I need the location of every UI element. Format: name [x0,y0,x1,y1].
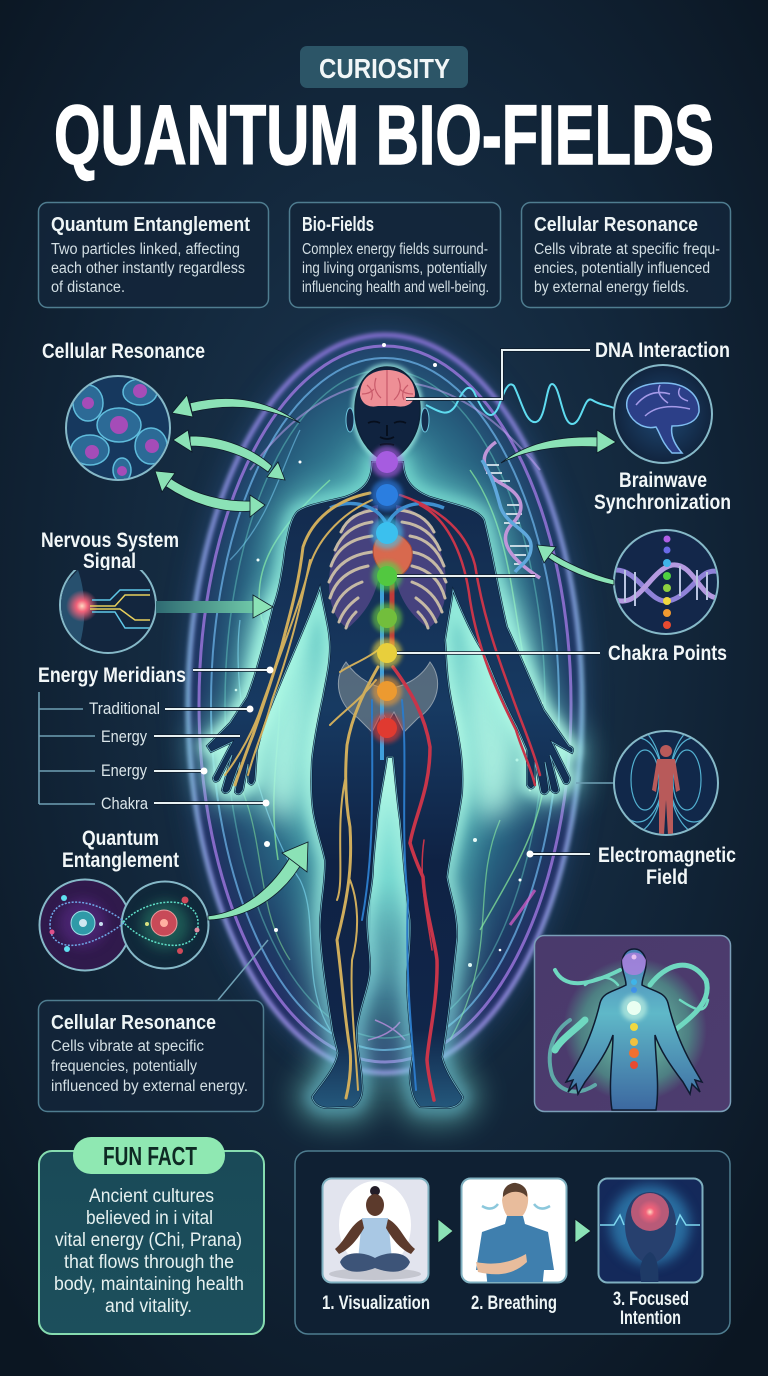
panel: bio-fields: Bio-Fields [302,214,374,236]
brainwave line [426,384,614,424]
panel: quantum entanglement: Two particles linked, affecting [51,241,240,258]
icon: entangled particles [40,880,208,970]
panel: cellular resonance top: Cells vibrate at specific frequ- [534,241,720,258]
icon: DNA chakra circle [614,530,720,634]
panel: energy figure [534,936,730,1112]
step 2 breathing image [462,1178,566,1290]
nerves: yellow meridians [225,493,378,1098]
heart [373,534,412,578]
meridians tree [39,692,95,804]
meridian sublabels: Chakra [101,794,148,813]
fun fact badge: FUN FACT [103,1141,197,1171]
meridian sublabels: Traditional [89,699,160,718]
label: nervous system signal [41,529,179,573]
label: quantum entanglement: Entanglement [62,849,179,872]
label: quantum entanglement [62,827,179,872]
meridian sublabels: Energy [101,761,147,780]
panel: fun fact: body, maintaining health [54,1274,244,1295]
fun fact badge [73,1137,225,1174]
arrow: chakra DNA to helix [537,545,614,585]
panel: practice steps [295,1151,730,1334]
label: nervous system signal: Signal [83,550,136,573]
label: energy meridians: Energy Meridians [38,664,186,687]
label: cellular resonance: Cellular Resonance [42,340,205,363]
panel: cellular resonance lower: Cellular Resonance [51,1012,216,1034]
spine channels [382,578,392,760]
panel: cellular resonance lower [38,940,268,1112]
label: brainwave synchronization: Synchronization [594,491,731,514]
arrow step 1 to 2 [438,1219,453,1243]
label: DNA interaction: DNA Interaction [595,339,730,362]
panel: quantum entanglement: Quantum Entanglement [51,214,250,236]
label: chakra points: Chakra Points [608,642,727,665]
callout: electromagnetic field: Field [646,866,688,889]
callout: electromagnetic field: Electromagnetic [598,844,736,867]
DNA helix [482,442,540,578]
energy field oval [186,333,584,1075]
mint glow between arms, torso and legs [249,590,528,1000]
panel: bio-fields [290,202,500,308]
pelvis [338,662,438,732]
arrow: entanglement to body [208,842,308,920]
meridian sublabels: Energy [101,727,147,746]
panel: bio-fields: influencing health and well-being. [302,279,489,296]
human body [207,367,573,1108]
header badge: CURIOSITY [300,46,468,88]
panel: fun fact: vital energy (Chi, Prana) [55,1230,242,1251]
callout: electromagnetic field [526,844,736,889]
chakra points [371,446,403,743]
arrow: DNA to brain [501,430,616,463]
icon: electromagnetic field circle [613,730,719,836]
panel: fun fact: believed in i vital [86,1208,213,1229]
panel: cellular resonance top: encies, potentially influenced [534,260,710,277]
callout lines: right side [397,350,614,783]
panel: fun fact: Ancient cultures [89,1186,214,1207]
lungs and rib cage [329,505,446,628]
arrow: nerve to arm [156,595,273,618]
step labels: 2. Breathing [471,1293,557,1314]
label: nervous system signal: Nervous System [41,529,179,552]
callout lines: meridians [154,666,274,806]
step labels: 1. Visualization [322,1293,430,1314]
collar vessels [330,503,444,525]
arrows: cells to body [155,395,300,517]
panel: cellular resonance lower: Cells vibrate at specific [51,1038,204,1055]
panel: quantum entanglement [38,202,268,308]
panel: cellular resonance lower: frequencies, potentially [51,1058,197,1075]
brain [360,370,415,407]
meridian sublabels [89,699,160,813]
label: brainwave synchronization [594,469,731,514]
panel: bio-fields: Complex energy fields surround- [302,241,488,258]
label: quantum entanglement: Quantum [82,827,159,850]
panel: cellular resonance top: by external energy fields. [534,279,689,296]
icon: nerve signal circle [59,570,157,654]
panel: cellular resonance lower: influenced by external energy. [51,1078,248,1095]
step labels: 3. Focused [613,1289,689,1310]
panel: fun fact: that flows through the [64,1252,234,1273]
step labels: Intention [620,1308,681,1329]
panel: quantum entanglement: each other instantly regardless [51,260,245,277]
step 1 visualization image [322,1178,428,1282]
label: brainwave synchronization: Brainwave [619,469,707,492]
head [346,367,429,462]
panel: bio-fields: ing living organisms, potentially [302,260,487,277]
panel: quantum entanglement: of distance. [51,279,125,296]
panel: cellular resonance top: Cellular Resonance [534,214,698,236]
panel: cellular resonance top [522,202,730,308]
vessels: red arteries [362,495,540,1100]
header badge: CURIOSITY: CURIOSITY [319,53,450,84]
icon: brain circle [614,365,712,463]
panel: fun fact: and vitality. [105,1296,192,1317]
step 3 focused intention image [598,1178,702,1290]
step labels [322,1289,689,1329]
icon: cells circle [66,376,170,482]
arrow step 2 to 3 [575,1219,591,1243]
panel: fun fact [39,1137,264,1334]
